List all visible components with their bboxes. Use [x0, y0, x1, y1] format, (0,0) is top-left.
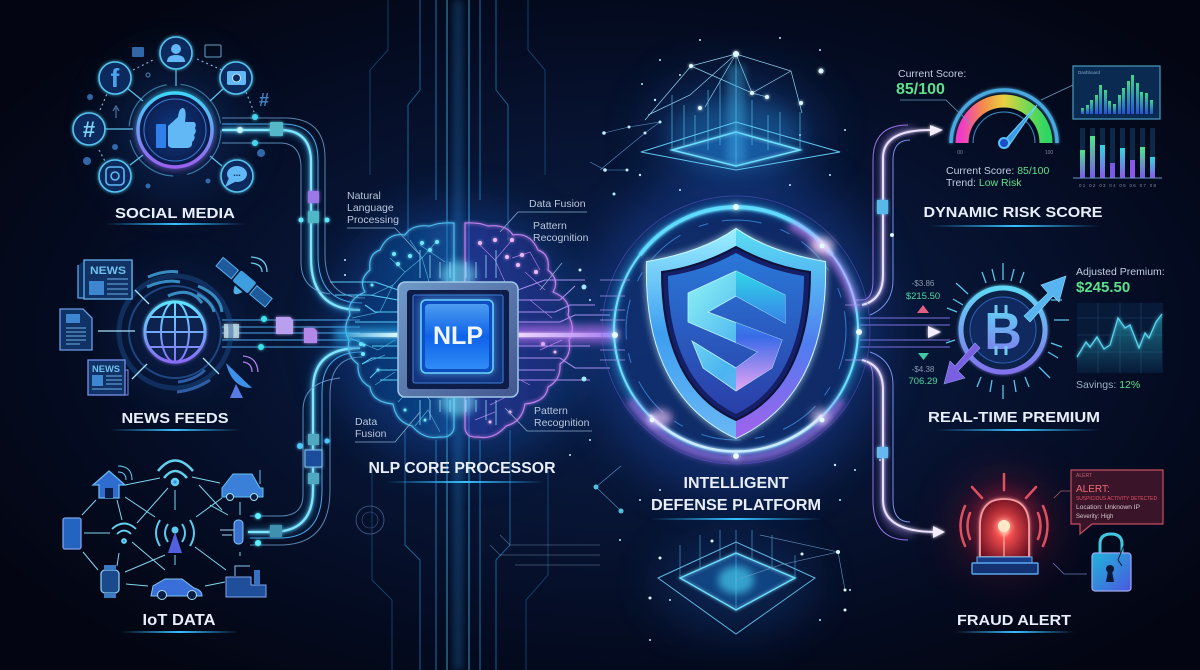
panel: iot data [63, 460, 266, 633]
icon: satellite signal [251, 257, 267, 272]
icon: hashtag: # [83, 117, 95, 142]
label: data fusion bottom [355, 412, 420, 442]
arrow down [944, 343, 980, 384]
heading: intelligent defense platform [650, 475, 822, 520]
label: data fusion bottom: Fusion [355, 428, 387, 440]
icon: wifi small [112, 524, 136, 543]
panel: right output pipes [855, 125, 950, 540]
icon: camera [220, 62, 252, 94]
icon: chat [221, 160, 253, 192]
vertical bar chart: 01 02 03 04 05 06 07 08 [1079, 183, 1156, 188]
icon: newspaper small [88, 360, 128, 395]
icon: home [93, 466, 132, 498]
panel: news feeds [60, 256, 273, 431]
icon: globe with rings [98, 272, 231, 392]
heading: iot data [120, 612, 240, 633]
score text [946, 165, 1049, 189]
heading: intelligent defense platform: INTELLIGENT [684, 475, 789, 492]
bar panel [1041, 66, 1160, 119]
top crystal structure [641, 51, 840, 170]
line chart [1077, 303, 1163, 373]
price up: $215.50 [906, 291, 940, 302]
label: natural language processing: Language [347, 202, 394, 214]
price down: -$4.38 [912, 365, 935, 374]
coin [946, 263, 1069, 399]
heading: social media: SOCIAL MEDIA [115, 205, 235, 222]
icon: dish [226, 356, 258, 398]
arrow [928, 326, 941, 338]
alert box: Location: Unknown IP [1076, 505, 1140, 511]
chip traces [330, 250, 610, 425]
icon: truck [222, 470, 263, 500]
heading: news feeds [110, 410, 240, 431]
shield ring [600, 196, 870, 464]
price down: 706.29 [908, 376, 938, 387]
icon: hashtag [73, 113, 105, 145]
heading: iot data: IoT DATA [142, 612, 216, 629]
brain right lobe [465, 223, 572, 438]
heading: news feeds: NEWS FEEDS [122, 410, 228, 427]
icon: user [160, 37, 192, 69]
icon: chat: ... [233, 168, 241, 178]
label: natural language processing: Processing [347, 214, 399, 226]
bar panel: Dashboard [1078, 70, 1101, 75]
premium value: Adjusted Premium: [1076, 266, 1165, 278]
alert box: Severity: High [1076, 514, 1113, 520]
label: natural language processing [347, 190, 420, 255]
alert box [1054, 470, 1163, 534]
premium value [1076, 266, 1165, 296]
heading: nlp core processor: NLP CORE PROCESSOR [368, 460, 556, 477]
gauge [951, 90, 1057, 156]
pipe data packets [224, 114, 330, 546]
heading: real-time premium: REAL-TIME PREMIUM [928, 409, 1100, 426]
alert box: ALERT [1076, 473, 1092, 479]
icon: car [151, 579, 202, 600]
icon: S logo [688, 271, 785, 391]
small floating icons: # [259, 90, 269, 110]
panel: social media [73, 37, 269, 225]
coin: B [984, 303, 1022, 361]
current score callout [896, 68, 972, 125]
vertical bar chart [1073, 128, 1162, 188]
icon: facebook [99, 62, 131, 94]
icon: newspaper [78, 260, 132, 299]
icon: newspaper: NEWS [90, 265, 126, 277]
heading: social media [105, 205, 245, 225]
premium value: $245.50 [1076, 279, 1130, 296]
label: pattern recognition top: Recognition [533, 232, 589, 244]
icon: facebook: f [111, 63, 120, 93]
savings: Savings: 12% [1076, 379, 1140, 391]
score text: Trend: Low Risk [946, 177, 1022, 189]
chip label: NLP [433, 322, 483, 350]
icon: lock [1053, 534, 1131, 591]
heading: dynamic risk score: DYNAMIC RISK SCORE [924, 204, 1102, 221]
icon: sensor [220, 520, 243, 544]
current score callout: 85/100 [896, 81, 945, 98]
icon: instagram [99, 160, 131, 192]
icon: watch [101, 565, 119, 598]
alert box: SUSPICIOUS ACTIVITY DETECTED [1076, 496, 1157, 502]
label: pattern recognition bottom: Recognition [534, 417, 590, 429]
label: pattern recognition top [533, 220, 589, 290]
icon: satellite [210, 256, 273, 314]
brain left lobe [346, 223, 454, 438]
gauge: 00 [957, 150, 963, 156]
gauge: 100 [1045, 150, 1053, 156]
label: pattern recognition bottom [505, 405, 592, 431]
label: pattern recognition top: Pattern [533, 220, 567, 232]
heading: intelligent defense platform: DEFENSE PLATFORM [651, 497, 821, 514]
icon: tower [156, 520, 194, 553]
icon: thumbs up hub [138, 93, 212, 167]
panel: dynamic risk score [896, 66, 1162, 227]
label: data fusion top: Data Fusion [529, 198, 586, 210]
current score callout: Current Score: [898, 68, 966, 80]
icon: factory [226, 566, 266, 597]
label: pattern recognition bottom: Pattern [534, 405, 568, 417]
bottom crystal structure [648, 530, 846, 634]
chip beam [335, 261, 617, 416]
heading: fraud alert: FRAUD ALERT [957, 612, 1071, 629]
arrow up [1024, 276, 1066, 322]
panel: nlp core processor [330, 190, 617, 483]
label: data fusion bottom: Data [355, 416, 377, 428]
chip [398, 282, 518, 397]
starfield and network [344, 37, 881, 641]
central vertical circuit traces [370, 0, 600, 670]
icon: newspaper small: NEWS [92, 364, 120, 374]
icon: phone [63, 518, 81, 549]
shield [647, 229, 825, 438]
pipes: left inputs to brain [222, 118, 365, 545]
price up [906, 279, 940, 313]
icon: wifi top [158, 460, 193, 485]
icon: connectors and orbits [99, 59, 254, 176]
panel: fraud alert [933, 470, 1163, 633]
network lines [82, 477, 240, 586]
score text: Current Score: 85/100 [946, 165, 1049, 177]
panel: real-time premium [906, 263, 1165, 431]
arrow [930, 125, 943, 136]
price up: -$3.86 [912, 279, 935, 288]
label: data fusion top [500, 198, 587, 232]
icon: document [60, 309, 92, 350]
arrow [933, 526, 945, 538]
label: natural language processing: Natural [347, 190, 381, 202]
alert box: ALERT: [1076, 484, 1110, 495]
small floating icons [83, 45, 269, 188]
price down [908, 353, 938, 387]
icon: beacon [960, 474, 1048, 574]
